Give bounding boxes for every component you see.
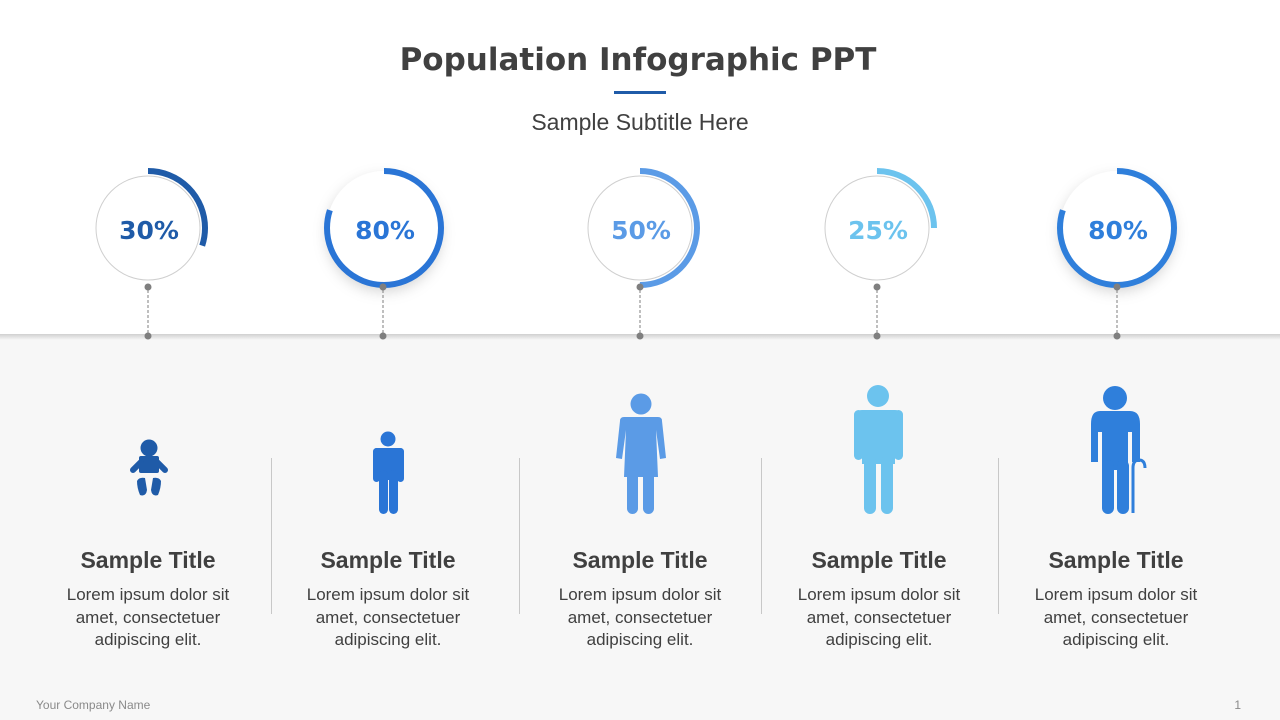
text block 4: adipiscing elit.: [826, 630, 932, 649]
gauge 4: 25%: [820, 171, 934, 285]
text block 5: Lorem ipsum dolor sit: [1035, 585, 1198, 604]
text block 4: [798, 547, 961, 649]
text block 2: adipiscing elit.: [335, 630, 441, 649]
title underline: [614, 91, 666, 94]
text block 5: adipiscing elit.: [1063, 630, 1169, 649]
gauge 5: 80%: [1060, 171, 1174, 285]
text block 5: amet, consectetuer: [1044, 608, 1189, 627]
gauge 3: 50%: 50%: [611, 216, 671, 245]
column texts: [67, 547, 1198, 649]
gauge 4: 25%: 25%: [848, 216, 908, 245]
text block 2: amet, consectetuer: [316, 608, 461, 627]
text block 2: Lorem ipsum dolor sit: [307, 585, 470, 604]
icon: man: [854, 385, 903, 514]
text block 3: Sample Title: [572, 547, 708, 573]
text block 3: [559, 547, 722, 649]
text block 3: amet, consectetuer: [568, 608, 713, 627]
text block 4: amet, consectetuer: [807, 608, 952, 627]
text block 2: Sample Title: [320, 547, 456, 573]
icon: woman: [616, 394, 666, 514]
text block 3: Lorem ipsum dolor sit: [559, 585, 722, 604]
gauge 1: 30%: 30%: [119, 216, 179, 245]
text block 1: amet, consectetuer: [76, 608, 221, 627]
text block 5: Sample Title: [1048, 547, 1184, 573]
dividers: [272, 458, 998, 614]
title: Population Infographic PPT: [400, 42, 876, 78]
text block 4: Lorem ipsum dolor sit: [798, 585, 961, 604]
subtitle: Sample Subtitle Here: [531, 109, 749, 135]
text block 5: [1035, 547, 1198, 649]
text block 1: Sample Title: [80, 547, 216, 573]
connectors: [144, 284, 1120, 340]
text block 2: [307, 547, 470, 649]
text block 3: adipiscing elit.: [587, 630, 693, 649]
lower background band: [0, 335, 1280, 720]
gauge 5: 80%: 80%: [1088, 216, 1148, 245]
icon: baby: [133, 440, 165, 495]
icon: boy: [373, 432, 404, 514]
text block 1: [67, 547, 230, 649]
gauge 2: 80%: [327, 171, 441, 285]
icon: elderly man: [1091, 386, 1145, 514]
gauge 3: 50%: [583, 171, 697, 285]
gauge 2: 80%: 80%: [355, 216, 415, 245]
text block 1: Lorem ipsum dolor sit: [67, 585, 230, 604]
page number: 1: [1234, 698, 1241, 712]
gauge 1: 30%: [91, 171, 205, 285]
text block 1: adipiscing elit.: [95, 630, 201, 649]
text block 4: Sample Title: [811, 547, 947, 573]
footer company name: Your Company Name: [36, 698, 151, 712]
